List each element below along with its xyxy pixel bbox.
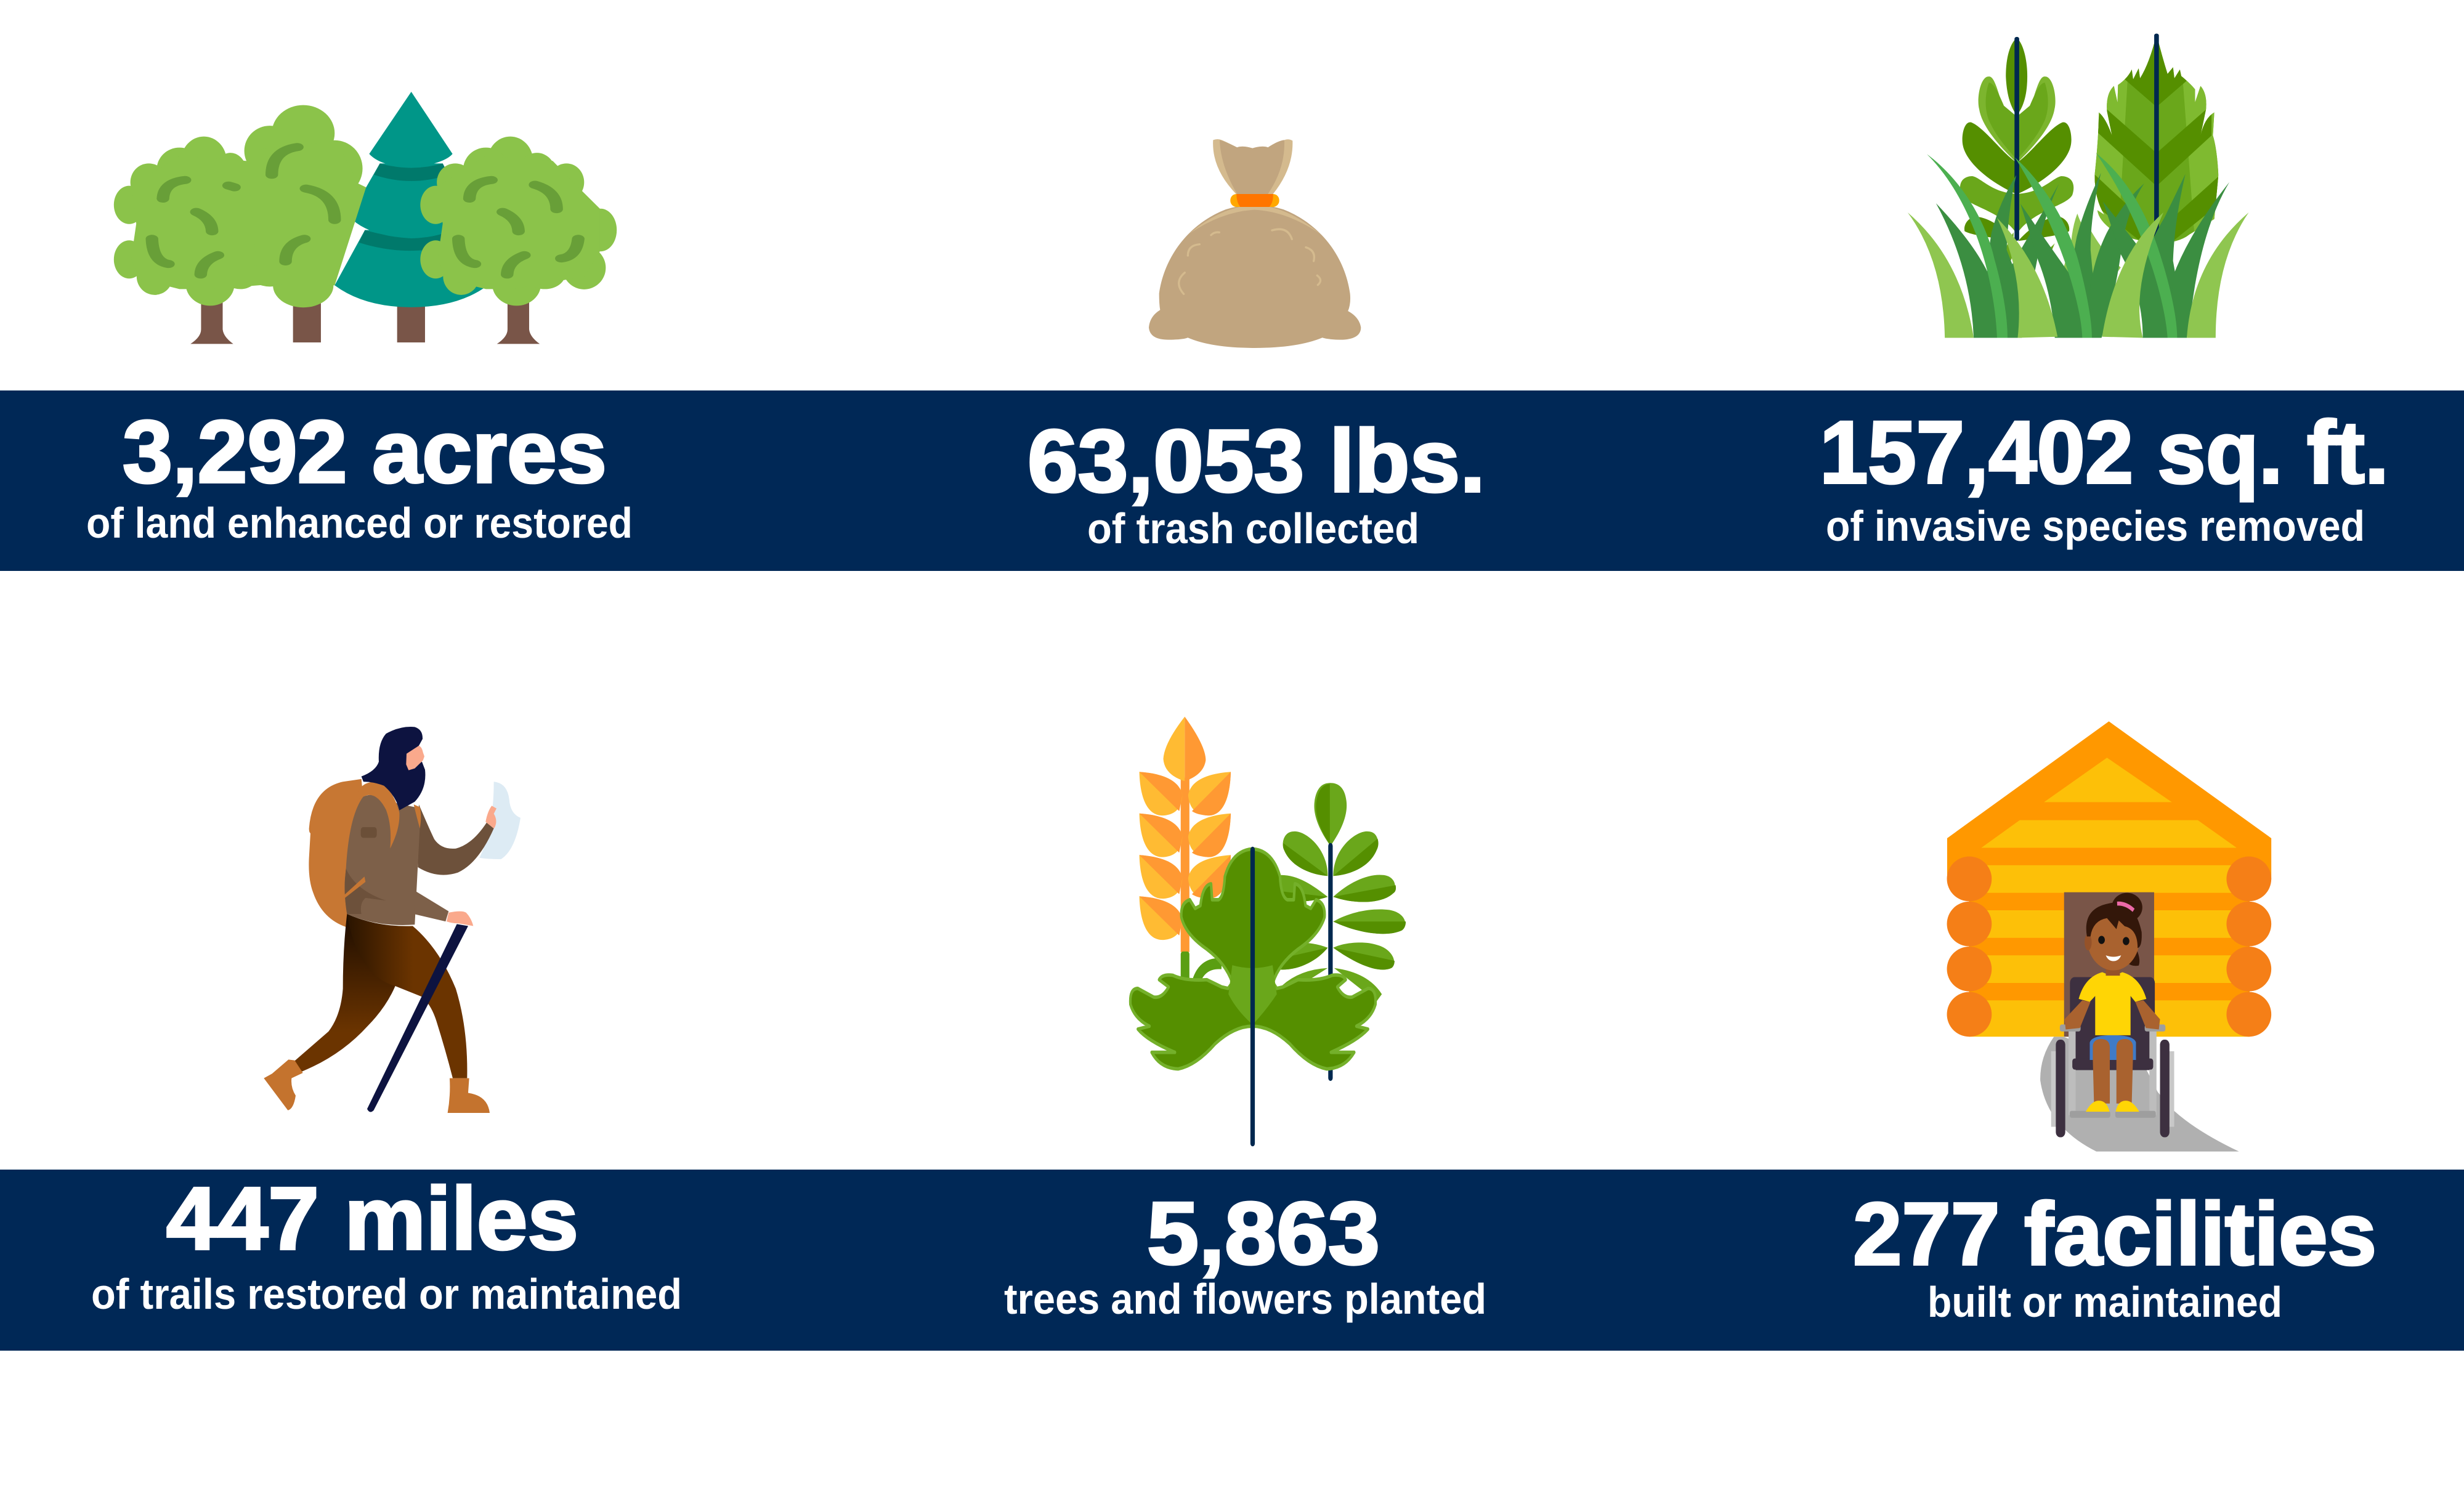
- girl: [2065, 893, 2160, 1112]
- cabin door: [2064, 892, 2154, 1037]
- wheelchair: [2051, 977, 2174, 1138]
- caption: trails: of trails restored or maintained: [91, 1270, 682, 1318]
- large central leaf: [1130, 849, 1376, 1143]
- pine tree: [334, 92, 488, 307]
- near arm and hand: [414, 891, 473, 926]
- icon: trash bag: [1149, 139, 1361, 348]
- caption: facilities: built or maintained: [1927, 1278, 2282, 1326]
- figure: pounds: 63,053 lbs.: [1027, 411, 1485, 511]
- backpack: [309, 779, 368, 928]
- figure: acres: 3,292 acres: [123, 402, 607, 501]
- figure: miles: 447 miles: [166, 1169, 578, 1268]
- caption: land: of land enhanced or restored: [86, 499, 633, 547]
- grass blades: [1908, 153, 2248, 338]
- face: [406, 746, 424, 770]
- bag body: [1149, 205, 1361, 348]
- figure: trees count: 5,863: [1147, 1184, 1380, 1283]
- sweater: [344, 782, 421, 925]
- map paper: [479, 782, 521, 859]
- round tree right: [420, 137, 617, 305]
- icon: trees: [114, 92, 617, 344]
- round tree left and centre: [114, 105, 366, 307]
- caption: trash: of trash collected: [1087, 504, 1419, 552]
- wheelchair shadow: [2040, 1037, 2239, 1152]
- far arm: [418, 804, 496, 875]
- icon: hiker: [264, 727, 521, 1113]
- bag creases: [1179, 229, 1321, 294]
- bag neck: [1213, 139, 1292, 194]
- caption: invasive species: of invasive species removed: [1826, 502, 2365, 550]
- stat: trash collected: [1027, 411, 1485, 552]
- band: top statistics: [0, 390, 2464, 571]
- right leaf: [2094, 33, 2219, 241]
- figure: square feet: 157,402 sq. ft.: [1820, 403, 2389, 502]
- caption: trees and flowers: trees and flowers planted: [1004, 1275, 1486, 1323]
- stat: trees planted: [1004, 1184, 1486, 1323]
- orange plant: [1140, 717, 1231, 984]
- stat: trails restored: [91, 1169, 682, 1318]
- icon: log cabin with wheelchair user: [1947, 721, 2271, 1152]
- icon: trees and flowers: [1130, 717, 1406, 1143]
- band: bottom statistics: [0, 1170, 2464, 1351]
- foliage marks: [152, 147, 578, 275]
- left leaf: [1960, 38, 2073, 277]
- figure: facilities: 277 facilities: [1853, 1184, 2377, 1284]
- icon: invasive plants: [1908, 32, 2248, 338]
- stat: facilities: [1853, 1184, 2377, 1326]
- cabin log ends: [1947, 857, 2271, 1037]
- tree trunks: [190, 299, 540, 344]
- hair and beard: [362, 727, 425, 811]
- stat: land enhanced: [86, 402, 633, 547]
- stat: invasive species removed: [1820, 403, 2389, 550]
- trousers: [294, 914, 467, 1078]
- green compound leaf plant: [1195, 783, 1406, 1078]
- boots: [264, 1059, 490, 1113]
- bag tie: [1230, 194, 1279, 207]
- cabin walls and roof: [1947, 721, 2271, 1037]
- walking stick: [367, 924, 468, 1112]
